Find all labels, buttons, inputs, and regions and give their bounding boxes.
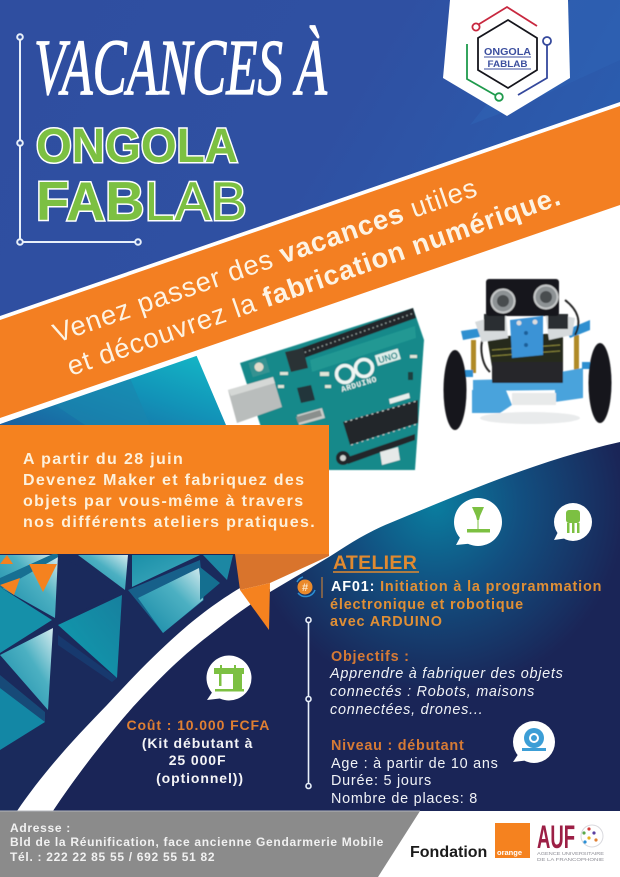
workshop title: Initiation à la programmation (375, 579, 602, 595)
cost: Coût : 10.000 FCFA (126, 717, 270, 733)
workshop title: électronique et robotique (330, 597, 524, 613)
workshop title: avec ARDUINO (330, 614, 443, 630)
objectifs: Apprendre à fabriquer des objets (329, 666, 564, 682)
orange logo (495, 823, 530, 858)
panel text: A partir du 28 juin (23, 451, 184, 468)
panel text: Devenez Maker et fabriquez des (23, 472, 305, 489)
niveau: Age : à partir de 10 ans (331, 756, 499, 772)
cost: (Kit débutant à (142, 735, 253, 751)
atelier heading: ATELIER (333, 552, 417, 574)
orange text panel (0, 425, 329, 554)
left teal pattern (0, 553, 270, 811)
title: vacances à: VACANCES À (34, 25, 327, 112)
vertical connector (306, 618, 311, 788)
photo: robot (444, 279, 612, 430)
title: fablab: FABLAB (36, 170, 247, 232)
fondation label: Fondation (410, 844, 487, 861)
orange logo: orange (497, 848, 522, 857)
white curved strip (17, 560, 300, 811)
arduino label: ARDUINO (340, 375, 378, 395)
hash badge (297, 577, 322, 598)
cost: 25 000F (169, 752, 226, 768)
photo: arduino board (228, 308, 424, 470)
address: Adresse : (10, 821, 71, 835)
objectifs: connectés : Robots, maisons (330, 684, 535, 700)
logo badge (443, 0, 570, 116)
panel text: objets par vous-même à travers (23, 493, 304, 510)
address: Bld de la Réunification, face ancienne Gendarmerie Mobile (10, 835, 384, 849)
band headline line 1: Venez passer des vacances utiles (49, 171, 481, 349)
icon: component bubble (554, 503, 592, 541)
arduino infinity mark (336, 360, 372, 382)
orange diagonal band (0, 102, 620, 424)
niveau: Durée: 5 jours (331, 773, 432, 789)
orange banner fold (235, 554, 329, 630)
title bracket (17, 34, 141, 245)
panel text: nos différents ateliers pratiques. (23, 514, 316, 531)
AUF logo: DE LA FRANCOPHONIE (537, 857, 604, 862)
icon: sewing machine bubble (206, 656, 252, 700)
niveau: Nombre de places: 8 (331, 791, 478, 807)
upper teal pattern (0, 352, 226, 430)
workshop title: AF01: (331, 579, 375, 595)
AUF logo: AUF (537, 819, 575, 855)
title: ongola: ONGOLA (36, 120, 238, 173)
icon: filament spool bubble (513, 721, 555, 763)
address: Tél. : 222 22 85 55 / 692 55 51 82 (10, 850, 215, 864)
top blue background (0, 0, 620, 320)
icon: laser cutter bubble (454, 498, 502, 546)
niveau: Niveau : débutant (331, 738, 464, 754)
dark lower right panel (53, 442, 620, 811)
band headline line 2: et découvrez la fabrication numérique. (63, 180, 565, 382)
logo text: ONGOLA (484, 47, 531, 58)
objectifs: Objectifs : (331, 649, 410, 665)
small orange triangles (0, 555, 57, 595)
uno label: UNO (377, 350, 399, 365)
hash badge: # (302, 582, 308, 594)
footer grey bar (0, 811, 420, 877)
light blue streak behind logo (470, 0, 620, 125)
objectifs: connectées, drones... (330, 702, 483, 718)
logo badge: FABLAB (488, 59, 528, 69)
cost: (optionnel)) (156, 770, 244, 786)
AUF logo: AGENCE UNIVERSITAIRE (537, 851, 604, 856)
